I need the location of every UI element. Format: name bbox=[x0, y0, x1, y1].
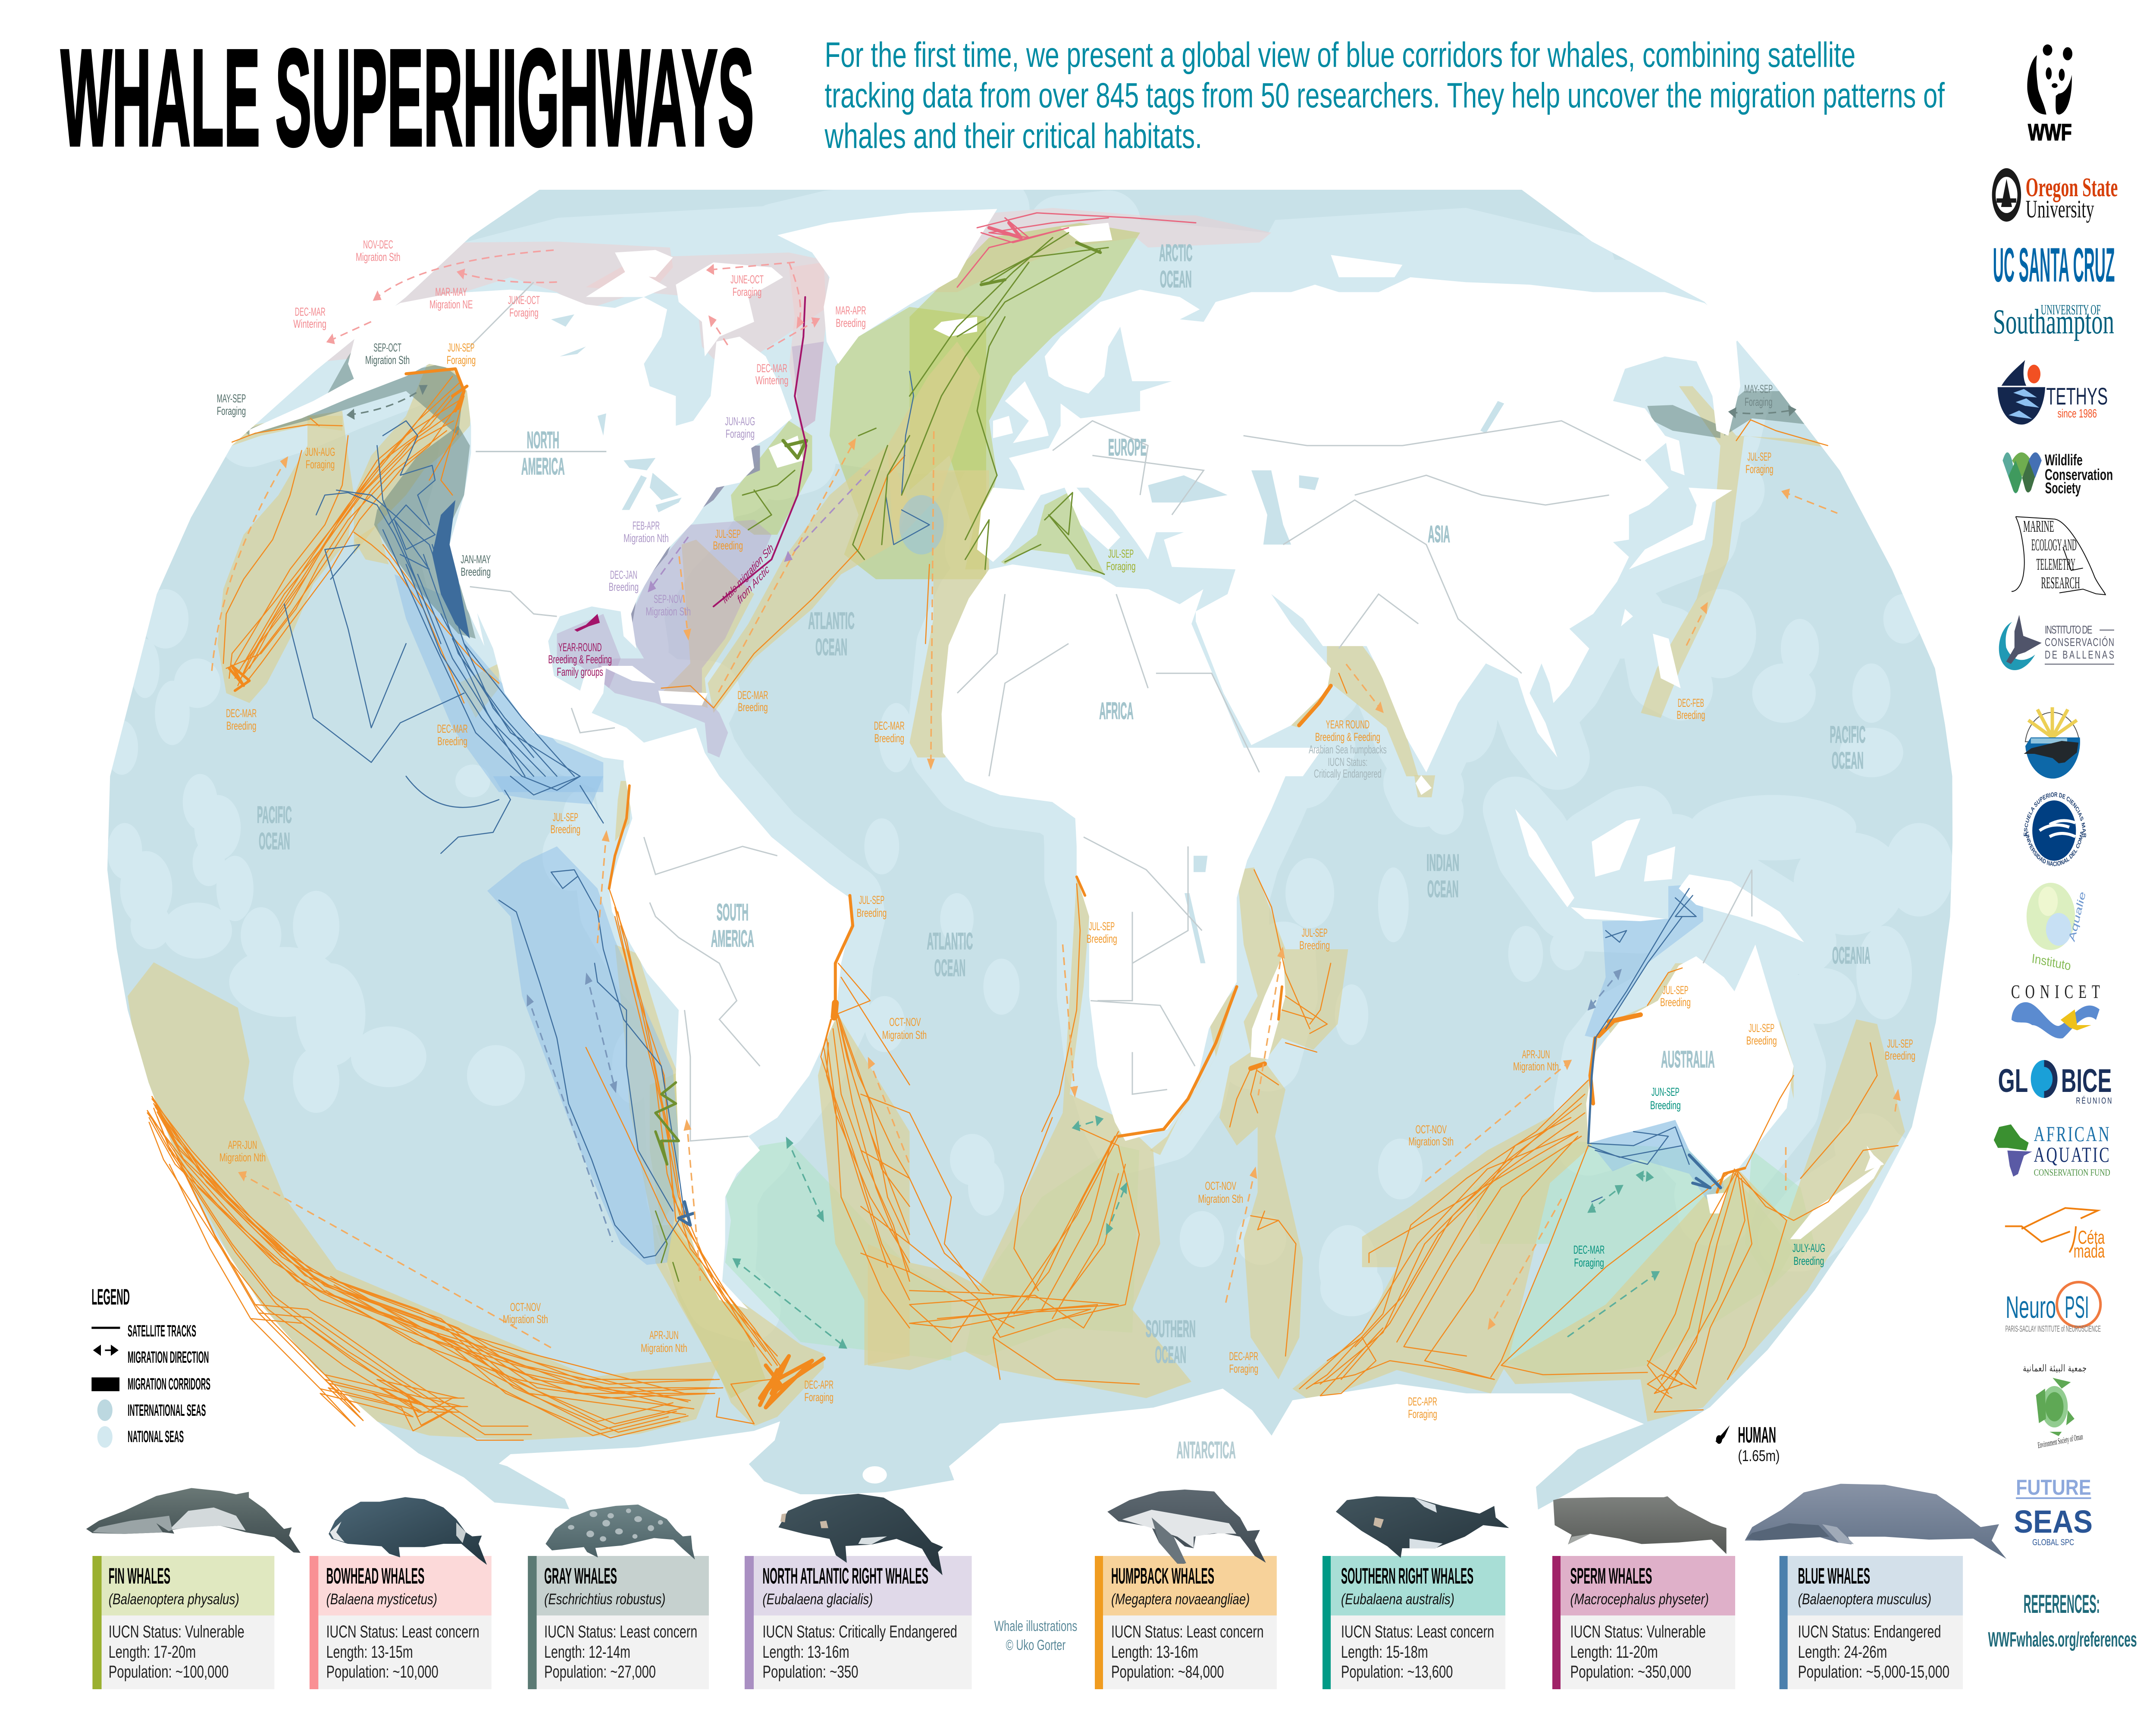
satellite tracks: humpback whales bbox=[147, 369, 1898, 1440]
seasonal habitat labels: humpback whales: JUL-SEP bbox=[1749, 1022, 1774, 1035]
corridors: gray whales bbox=[244, 302, 1820, 639]
seasonal habitat labels: humpback whales: Breeding bbox=[226, 719, 257, 732]
legend: SATELLITE TRACKS bbox=[128, 1321, 196, 1340]
logo: University of Southampton: Southampton bbox=[1993, 302, 2114, 342]
seasonal habitat labels: humpback whales: Migration Nth bbox=[219, 1151, 266, 1164]
ocean and continent labels: AUSTRALIA bbox=[1661, 1046, 1715, 1073]
seasonal habitat labels: humpback whales: Foraging bbox=[1408, 1408, 1437, 1421]
legend: MIGRATION CORRIDORS bbox=[128, 1374, 210, 1393]
logo: Wildlife Conservation Society: Wildlife bbox=[2045, 452, 2083, 469]
migration direction arrows bbox=[212, 250, 1898, 1350]
card: fin whales bbox=[109, 1563, 244, 1681]
references: REFERENCES: bbox=[2024, 1590, 2100, 1618]
corridors: north atlantic right whales bbox=[557, 342, 824, 757]
card: sperm whales bbox=[1570, 1563, 1709, 1681]
seasonal habitat labels: bowhead whales: Breeding bbox=[836, 317, 866, 329]
card: gray whales: GRAY WHALES bbox=[544, 1563, 617, 1589]
card: sperm whales: SPERM WHALES bbox=[1570, 1563, 1652, 1589]
seasonal habitat labels: bowhead whales: Migration NE bbox=[429, 298, 473, 311]
card: sperm whales: Length: 11-20m bbox=[1570, 1643, 1658, 1662]
seasonal habitat labels: southern right whales: Breeding bbox=[1650, 1099, 1681, 1112]
seasonal habitat labels: humpback whales: OCT-NOV bbox=[510, 1301, 541, 1314]
lakes and inland seas bbox=[551, 314, 1504, 963]
logo: Environment Society of Oman: جمعية البيئة العمانية bbox=[2023, 1363, 2087, 1374]
whale illustrations: first four species bbox=[86, 1488, 943, 1575]
seasonal habitat labels: humpback whales: Foraging bbox=[447, 354, 476, 367]
seasonal habitat labels: bowhead whales: Foraging bbox=[733, 285, 761, 298]
legend: NATIONAL SEAS bbox=[128, 1427, 184, 1446]
arctic national seas bbox=[358, 198, 1758, 474]
fin whale bbox=[86, 1488, 301, 1553]
card: humpback whales: HUMPBACK WHALES bbox=[1111, 1563, 1214, 1589]
world map: OCEANIA bbox=[1832, 942, 1871, 969]
card: humpback whales bbox=[1111, 1563, 1264, 1681]
satellite tracks: bowhead whales bbox=[957, 213, 1196, 287]
seasonal habitat labels: southern right whales bbox=[1573, 1085, 1825, 1269]
logo: Globice Reunion bbox=[1998, 1060, 2112, 1106]
logo: African Aquatic Conservation Fund bbox=[1994, 1122, 2110, 1178]
logo: Wildlife Conservation Society bbox=[2002, 452, 2113, 497]
illustration credit bbox=[994, 1618, 1077, 1653]
ocean and continent labels: PACIFIC bbox=[257, 802, 292, 828]
ocean and continent labels: OCEAN bbox=[815, 634, 847, 661]
card: blue whales: IUCN Status: Endangered bbox=[1798, 1622, 1941, 1641]
card: humpback whales: (Megaptera novaeangliae) bbox=[1111, 1591, 1250, 1608]
seasonal habitat labels: humpback whales: JUL-SEP bbox=[1748, 450, 1771, 463]
seasonal habitat labels: north atlantic right whales: FEB-APR bbox=[633, 519, 660, 532]
seasonal habitat labels: gray whales: Migration Sth bbox=[365, 354, 410, 367]
seasonal habitat labels: gray whales: JAN-MAY bbox=[461, 553, 491, 566]
ocean and continent labels: AFRICA bbox=[1099, 698, 1134, 724]
logo: African Aquatic Conservation Fund: AFRICAN bbox=[2034, 1122, 2109, 1146]
seasonal habitat labels: humpback whales: DEC-MAR bbox=[437, 722, 468, 735]
card: gray whales: (Eschrichtius robustus) bbox=[544, 1591, 665, 1608]
seasonal habitat labels: fin whales: Foraging bbox=[1106, 560, 1136, 573]
logo: NeuroPSI bbox=[2006, 1282, 2101, 1334]
intro text: For the first time, we present a global view of blue corridors for whales, combining satellite bbox=[825, 35, 1855, 75]
card: north atlantic right whales: (Eubalaena glacialis) bbox=[762, 1591, 873, 1608]
seasonal habitat labels: humpback whales: Foraging bbox=[1745, 463, 1774, 476]
card: southern right whales bbox=[1341, 1563, 1494, 1681]
sperm whale family group patch bbox=[574, 614, 600, 632]
ocean and continent labels: AMERICA bbox=[711, 925, 754, 952]
seasonal habitat labels: humpback whales: JUL-SEP bbox=[859, 894, 884, 906]
references bbox=[1988, 1590, 2137, 1651]
logo: Escuela Superior de Ciencias Marinas: ESCUELA SUPERIOR DE CIENCIAS MARINAS bbox=[0, 0, 2087, 838]
title: WHALE SUPERHIGHWAYS bbox=[61, 21, 754, 175]
ocean and continent labels: ARCTIC bbox=[1159, 240, 1192, 267]
seasonal habitat labels: humpback whales: Breeding bbox=[437, 735, 467, 748]
logo: Wildlife Conservation Society: Society bbox=[2045, 480, 2081, 497]
logo: African Aquatic Conservation Fund: CONSERVATION FUND bbox=[2034, 1167, 2110, 1178]
card: blue whales: BLUE WHALES bbox=[1798, 1563, 1870, 1589]
logo: University of Southampton: UNIVERSITY OF bbox=[2041, 302, 2101, 318]
seasonal habitat labels: humpback whales: Breeding bbox=[551, 823, 580, 836]
logo: Instituto Aqualie: Aqualie bbox=[2067, 890, 2088, 943]
satellite tracks: blue whales bbox=[284, 371, 1720, 1258]
seasonal habitat labels: southern right whales: DEC-MAR bbox=[1573, 1243, 1604, 1256]
ocean and continent labels: NORTH bbox=[527, 427, 559, 454]
logo: Future Seas: GLOBAL SPC bbox=[2032, 1537, 2074, 1547]
seasonal habitat labels: humpback whales: APR-JUN bbox=[228, 1138, 257, 1151]
seasonal habitat labels: gray whales: Foraging bbox=[217, 405, 246, 417]
logo: African Aquatic Conservation Fund: AQUATIC bbox=[2034, 1143, 2109, 1167]
seasonal habitat labels: humpback whales: Migration Nth bbox=[1513, 1060, 1559, 1073]
card: north atlantic right whales: Population: ~350 bbox=[762, 1662, 859, 1681]
legend: LEGEND bbox=[91, 1284, 130, 1310]
logo: Instituto de Conservacion de Ballenas: CONSERVACIÓN bbox=[2045, 636, 2114, 649]
blue whale coastal band bbox=[432, 500, 470, 639]
seasonal habitat labels: humpback whales: Breeding bbox=[1746, 1034, 1777, 1047]
panel backgrounds: species cards bbox=[92, 1556, 1963, 1689]
card: north atlantic right whales: NORTH ATLANTIC RIGHT WHALES bbox=[762, 1563, 928, 1589]
satellite tracks: fin whales bbox=[655, 233, 1108, 1281]
corridors: bowhead whales bbox=[322, 208, 1271, 431]
seasonal habitat labels: bowhead whales: JUNE-OCT bbox=[730, 273, 764, 286]
seasonal habitat labels: humpback whales: JUL-SEP bbox=[1089, 920, 1115, 933]
blue whale bbox=[1745, 1484, 2006, 1559]
seasonal habitat labels: humpback whales: Breeding bbox=[738, 701, 768, 714]
seasonal habitat labels: gray whales: MAY-SEP bbox=[217, 392, 246, 405]
logo: Instituto Aqualie: Instituto bbox=[2031, 952, 2071, 973]
corridors: blue whales bbox=[395, 495, 1724, 1265]
seasonal habitat labels: bowhead whales: Wintering bbox=[755, 374, 789, 387]
seasonal habitat labels: humpback whales: Breeding bbox=[1660, 996, 1691, 1009]
seasonal habitat labels: bowhead whales: Foraging bbox=[509, 306, 539, 319]
card: fin whales: IUCN Status: Vulnerable bbox=[109, 1622, 244, 1641]
logo: Oregon State University: Oregon State bbox=[2026, 172, 2118, 202]
seasonal habitat labels: bowhead whales: JUNE-OCT bbox=[508, 294, 540, 307]
sperm whale bbox=[1553, 1496, 1727, 1554]
seasonal habitat labels: fin whales: JUL-SEP bbox=[1108, 547, 1134, 560]
seasonal habitat labels: north atlantic right whales: Migration Nth bbox=[624, 532, 669, 545]
seasonal habitat labels: humpback whales: OCT-NOV bbox=[889, 1016, 921, 1029]
logo: Tethys: TETHYS bbox=[2046, 383, 2108, 410]
seasonal habitat labels: bowhead whales: MAR-MAY bbox=[435, 285, 467, 298]
seasonal habitat labels: humpback whales: APR-JUN bbox=[649, 1329, 679, 1342]
seasonal habitat labels: southern right whales: Breeding bbox=[1793, 1255, 1824, 1267]
logo: Future Seas: SEAS bbox=[2014, 1504, 2093, 1540]
seasonal habitat labels: humpback whales: Foraging bbox=[804, 1391, 834, 1404]
logo: Cetamada: mada bbox=[2074, 1241, 2105, 1262]
illustration credit: Whale illustrations bbox=[994, 1618, 1077, 1634]
seasonal habitat labels: bowhead whales: DEC-MAR bbox=[295, 305, 326, 318]
seasonal habitat labels: humpback whales: Breeding bbox=[1677, 709, 1705, 721]
ocean and continent labels: ANTARCTICA bbox=[1177, 1437, 1236, 1464]
logo: Instituto de Conservacion de Ballenas: INSTITUTO DE bbox=[2045, 624, 2092, 636]
illustration credit: © Uko Gorter bbox=[1006, 1637, 1065, 1653]
logo: Cetamada bbox=[2005, 1208, 2105, 1262]
seasonal habitat labels: humpback whales: Breeding & Feeding bbox=[1315, 731, 1380, 743]
whale illustrations: last four species bbox=[1107, 1484, 2006, 1564]
logo: WWF: WWF bbox=[2028, 119, 2072, 145]
seasonal habitat labels: humpback whales: DEC-APR bbox=[804, 1378, 834, 1391]
card: blue whales: (Balaenoptera musculus) bbox=[1798, 1591, 1931, 1608]
logo: Marine Ecology and Telemetry Research: MARINE bbox=[2023, 518, 2054, 536]
card: gray whales: Length: 12-14m bbox=[544, 1643, 630, 1662]
seasonal habitat labels: humpback whales: DEC-FEB bbox=[1678, 696, 1704, 709]
logo: Globice Reunion: BICE bbox=[2061, 1063, 2112, 1099]
ocean and continent labels: SOUTH bbox=[717, 899, 749, 926]
logo: Instituto de Conservacion de Ballenas: DE BALLENAS bbox=[2045, 649, 2114, 661]
seasonal habitat labels: southern right whales: JULY-AUG bbox=[1792, 1242, 1825, 1255]
card: gray whales: IUCN Status: Least concern bbox=[544, 1622, 697, 1641]
logo: Future Seas bbox=[2014, 1476, 2093, 1547]
bowhead whale bbox=[329, 1497, 487, 1565]
seasonal habitat labels: bowhead whales: NOV-DEC bbox=[363, 238, 393, 251]
ocean and national seas bbox=[91, 190, 1971, 1527]
seasonal habitat labels: sperm whales bbox=[548, 541, 775, 678]
seasonal habitat labels: humpback whales: Breeding bbox=[857, 906, 887, 919]
card: north atlantic right whales: Length: 13-16m bbox=[762, 1643, 849, 1662]
seasonal habitat labels: bowhead whales: Migration Sth bbox=[356, 251, 400, 263]
world map bbox=[91, 190, 1971, 1527]
seasonal habitat labels: gray whales: MAY-SEP bbox=[1744, 383, 1773, 395]
gray whale bbox=[545, 1505, 695, 1559]
logo: Tethys bbox=[1998, 360, 2108, 424]
southern right whale bbox=[1336, 1496, 1509, 1558]
card: southern right whales: Population: ~13,600 bbox=[1341, 1662, 1453, 1681]
seasonal habitat labels: humpback whales: Breeding bbox=[1087, 932, 1117, 945]
seasonal habitat labels: humpback whales: Breeding bbox=[1299, 939, 1330, 952]
seasonal habitat labels: gray whales: Foraging bbox=[1745, 395, 1773, 408]
seasonal habitat labels: humpback whales: Migration Sth bbox=[1198, 1192, 1243, 1205]
seasonal habitat labels: southern right whales: Foraging bbox=[1574, 1256, 1604, 1269]
human scale bbox=[1715, 1422, 1780, 1465]
ocean and continent labels: PACIFIC bbox=[1830, 721, 1865, 748]
seasonal habitat labels: humpback whales: DEC-APR bbox=[1408, 1395, 1437, 1408]
seasonal habitat labels: humpback whales: JUL-SEP bbox=[715, 527, 741, 540]
card: blue whales: Length: 24-26m bbox=[1798, 1643, 1887, 1662]
logo: Marine Ecology and Telemetry Research: ECOLOGY AND bbox=[2031, 536, 2077, 554]
seasonal habitat labels: humpback whales: DEC-MAR bbox=[874, 719, 905, 732]
seasonal habitat labels: humpback whales: Breeding bbox=[1885, 1049, 1915, 1062]
logo: Oregon State University: University bbox=[2026, 195, 2094, 223]
legend: INTERNATIONAL SEAS bbox=[128, 1401, 206, 1419]
intro text: whales and their critical habitats. bbox=[824, 116, 1202, 156]
satellite tracks: sperm whales bbox=[714, 297, 806, 606]
card: north atlantic right whales: IUCN Status: Critically Endangered bbox=[762, 1622, 957, 1641]
species card text bbox=[109, 1563, 1949, 1681]
logo: Future Seas: FUTURE bbox=[2016, 1476, 2091, 1500]
logo: CONICET: CONICET bbox=[2011, 982, 2100, 1002]
card: bowhead whales: BOWHEAD WHALES bbox=[326, 1563, 424, 1589]
card: blue whales bbox=[1798, 1563, 1949, 1681]
ocean and continent labels: EUROPE bbox=[1108, 434, 1147, 461]
seasonal habitat labels: humpback whales: Migration Sth bbox=[1408, 1135, 1454, 1148]
logo: CONICET bbox=[2011, 982, 2100, 1038]
seasonal habitat labels: humpback whales: JUL-SEP bbox=[553, 811, 578, 824]
seasonal habitat labels: humpback whales: Migration Sth bbox=[503, 1313, 548, 1326]
card: sperm whales: (Macrocephalus physeter) bbox=[1570, 1591, 1709, 1608]
card: bowhead whales bbox=[326, 1563, 479, 1681]
ocean and continent labels: ATLANTIC bbox=[808, 608, 855, 634]
human scale: HUMAN bbox=[1738, 1422, 1776, 1448]
corridors: humpback whales bbox=[128, 342, 1905, 1440]
card: fin whales: Length: 17-20m bbox=[109, 1643, 196, 1662]
seasonal habitat labels: humpback whales: Foraging bbox=[1229, 1362, 1258, 1375]
ocean and continent labels: OCEAN bbox=[1832, 747, 1864, 774]
intro text: tracking data from over 845 tags from 50 researchers. They help uncover the migration patterns of bbox=[825, 76, 1945, 116]
seasonal habitat labels: humpback whales: JUN-SEP bbox=[448, 341, 474, 354]
ocean and continent labels: OCEAN bbox=[934, 955, 965, 982]
card: humpback whales: IUCN Status: Least concern bbox=[1111, 1622, 1264, 1641]
seasonal habitat labels: humpback whales: JUL-SEP bbox=[1302, 926, 1328, 939]
north america pointer line bbox=[476, 451, 606, 452]
intro text bbox=[824, 35, 1945, 156]
card: fin whales: FIN WHALES bbox=[109, 1563, 170, 1589]
seasonal habitat labels: humpback whales: JUN-AUG bbox=[305, 445, 335, 458]
seasonal habitat labels: humpback whales bbox=[219, 341, 1915, 1421]
seasonal habitat labels: humpback whales: Migration Sth bbox=[882, 1029, 927, 1041]
ocean and continent labels: AMERICA bbox=[521, 453, 565, 480]
seasonal habitat labels: humpback whales: Arabian Sea humpbacks bbox=[1309, 743, 1387, 756]
logo: Escuela Superior de Ciencias Marinas: UNIVERSIDAD NACIONAL DEL COMAHUE bbox=[0, 0, 2085, 868]
card: north atlantic right whales bbox=[762, 1563, 957, 1681]
logo: NeuroPSI: Neuro bbox=[2006, 1290, 2056, 1325]
human scale: (1.65m) bbox=[1738, 1447, 1780, 1465]
logo: Globice Reunion: GL bbox=[1998, 1063, 2028, 1099]
seasonal habitat labels: humpback whales: Critically Endangered bbox=[1314, 767, 1382, 780]
seasonal habitat labels: humpback whales: Migration Nth bbox=[641, 1342, 687, 1355]
card: bowhead whales: Population: ~10,000 bbox=[326, 1662, 439, 1681]
seasonal habitat labels: humpback whales: JUL-SEP bbox=[1663, 984, 1688, 997]
card: sperm whales: IUCN Status: Vulnerable bbox=[1570, 1622, 1706, 1641]
antarctica bbox=[499, 1384, 1644, 1514]
ocean and continent labels: ATLANTIC bbox=[927, 928, 973, 955]
card: southern right whales: Length: 15-18m bbox=[1341, 1643, 1428, 1662]
seasonal habitat labels: humpback whales: Breeding bbox=[713, 539, 743, 552]
seasonal habitat labels: sperm whales: Male migration Sth bbox=[721, 541, 775, 606]
card: gray whales: Population: ~27,000 bbox=[544, 1662, 656, 1681]
card: humpback whales: Length: 13-16m bbox=[1111, 1643, 1198, 1662]
card: fin whales: (Balaenoptera physalus) bbox=[109, 1591, 239, 1608]
seasonal habitat labels: north atlantic right whales: DEC-JAN bbox=[610, 568, 637, 581]
logo: Oregon State University bbox=[1992, 168, 2118, 223]
seasonal habitat labels: north atlantic right whales: Migration Sth bbox=[646, 605, 691, 618]
card: bowhead whales: Length: 13-15m bbox=[326, 1643, 413, 1662]
corridors: southern right whales bbox=[725, 1141, 1814, 1380]
logo: NeuroPSI: PSI bbox=[2065, 1290, 2089, 1325]
card: bowhead whales: (Balaena mysticetus) bbox=[326, 1591, 437, 1608]
card: southern right whales: SOUTHERN RIGHT WHALES bbox=[1341, 1563, 1473, 1589]
ocean and continent labels: ASIA bbox=[1428, 521, 1450, 548]
ocean and continent labels bbox=[257, 240, 1871, 1464]
north atlantic right whale bbox=[778, 1494, 943, 1575]
seasonal habitat labels: humpback whales: APR-JUN bbox=[1522, 1048, 1550, 1061]
seasonal habitat labels: north atlantic right whales: JUN-AUG bbox=[725, 415, 755, 428]
card: southern right whales: (Eubalaena australis) bbox=[1341, 1591, 1454, 1608]
seasonal habitat labels: gray whales: SEP-OCT bbox=[373, 341, 401, 354]
seasonal habitat labels: humpback whales: OCT-NOV bbox=[1205, 1179, 1236, 1192]
pacific and island EEZ blobs bbox=[107, 765, 905, 1113]
seasonal habitat labels: humpback whales: DEC-MAR bbox=[226, 707, 257, 720]
logo: Marine Ecology and Telemetry Research bbox=[2012, 517, 2106, 595]
ocean and continent labels: OCEAN bbox=[1427, 876, 1458, 903]
card: gray whales bbox=[544, 1563, 697, 1681]
logo: Instituto Aqualie bbox=[2027, 883, 2088, 973]
seasonal habitat labels: gray whales bbox=[217, 341, 1773, 578]
seasonal habitat labels: humpback whales: Breeding bbox=[874, 732, 904, 745]
seasonal habitat labels: sperm whales: from Arctic bbox=[736, 562, 771, 606]
logo: Instituto de Conservacion de Ballenas bbox=[1999, 615, 2114, 670]
logo: Cetamada: Céta bbox=[2078, 1227, 2105, 1248]
logo: Environment Society of Oman bbox=[2023, 1363, 2087, 1450]
card: sperm whales: Population: ~350,000 bbox=[1570, 1662, 1691, 1681]
country borders bbox=[470, 282, 1752, 1141]
logo: Marine Ecology and Telemetry Research: TELEMETRY bbox=[2036, 556, 2075, 574]
seasonal habitat labels: sperm whales: YEAR-ROUND bbox=[558, 641, 602, 654]
ocean and continent labels: SOUTHERN bbox=[1146, 1316, 1196, 1342]
logo: NeuroPSI: PARIS-SACLAY INSTITUTE of NEUROSCIENCE bbox=[2006, 1324, 2101, 1334]
seasonal habitat labels: humpback whales: IUCN Status: bbox=[1328, 756, 1367, 768]
seasonal habitat labels: humpback whales: DEC-APR bbox=[1229, 1350, 1258, 1363]
logo: WWF bbox=[2027, 44, 2072, 145]
seasonal habitat labels: north atlantic right whales bbox=[609, 415, 755, 618]
seasonal habitat labels: bowhead whales: MAR-APR bbox=[835, 304, 866, 317]
seasonal habitat labels: humpback whales: YEAR ROUND bbox=[1326, 718, 1369, 731]
seasonal habitat labels: bowhead whales bbox=[293, 238, 866, 387]
ocean and continent labels: INDIAN bbox=[1426, 850, 1459, 876]
seasonal habitat labels: bowhead whales: DEC-MAR bbox=[757, 362, 787, 375]
seasonal habitat labels: southern right whales: JUN-SEP bbox=[1651, 1085, 1680, 1098]
legend: MIGRATION DIRECTION bbox=[128, 1348, 209, 1366]
logo: Programa de Monitoreo Sanitario Ballena Franca Austral bbox=[2024, 707, 2080, 778]
humpback whale bbox=[1107, 1490, 1266, 1564]
logo: Globice Reunion: RÉUNION bbox=[2076, 1095, 2112, 1106]
seasonal habitat labels: north atlantic right whales: Breeding bbox=[609, 580, 639, 593]
land masses bbox=[249, 209, 1884, 1309]
card: bowhead whales: IUCN Status: Least concern bbox=[326, 1622, 479, 1641]
card: humpback whales: Population: ~84,000 bbox=[1111, 1662, 1224, 1681]
seasonal habitat labels: sperm whales: Breeding & Feeding bbox=[548, 653, 612, 666]
legend bbox=[91, 1284, 210, 1448]
seasonal habitat labels: humpback whales: OCT-NOV bbox=[1416, 1123, 1447, 1136]
card: fin whales: Population: ~100,000 bbox=[109, 1662, 229, 1681]
seasonal habitat labels: humpback whales: JUL-SEP bbox=[1887, 1037, 1913, 1050]
logo: Marine Ecology and Telemetry Research: RESEARCH bbox=[2041, 574, 2080, 592]
ocean and continent labels: OCEAN bbox=[259, 828, 290, 855]
logo: Environment Society of Oman: Environment Society of Oman bbox=[2037, 1432, 2084, 1450]
corridor: right whale nearshore and foraging bbox=[630, 445, 760, 624]
seasonal habitat labels: gray whales: Breeding bbox=[461, 565, 491, 578]
card: blue whales: Population: ~5,000-15,000 bbox=[1798, 1662, 1949, 1681]
seasonal habitat labels: north atlantic right whales: SEP-NOV bbox=[654, 593, 683, 605]
seasonal habitat labels: humpback whales: DEC-MAR bbox=[737, 689, 768, 702]
seasonal habitat labels: bowhead whales: Wintering bbox=[293, 317, 326, 330]
logo: Wildlife Conservation Society: Conservation bbox=[2045, 466, 2113, 483]
seasonal habitat labels: humpback whales: Foraging bbox=[306, 458, 335, 471]
seasonal habitat labels: north atlantic right whales: Foraging bbox=[726, 427, 755, 440]
ocean and continent labels: OCEAN bbox=[1155, 1342, 1186, 1368]
ocean and continent labels: OCEAN bbox=[1160, 266, 1192, 293]
seasonal habitat labels: fin whales bbox=[1106, 547, 1136, 573]
corridors: fin whales bbox=[650, 223, 1140, 1398]
logo: Tethys: since 1986 bbox=[2057, 407, 2097, 420]
card: southern right whales: IUCN Status: Least concern bbox=[1341, 1622, 1494, 1641]
seasonal habitat labels: sperm whales: Family groups bbox=[557, 665, 603, 678]
